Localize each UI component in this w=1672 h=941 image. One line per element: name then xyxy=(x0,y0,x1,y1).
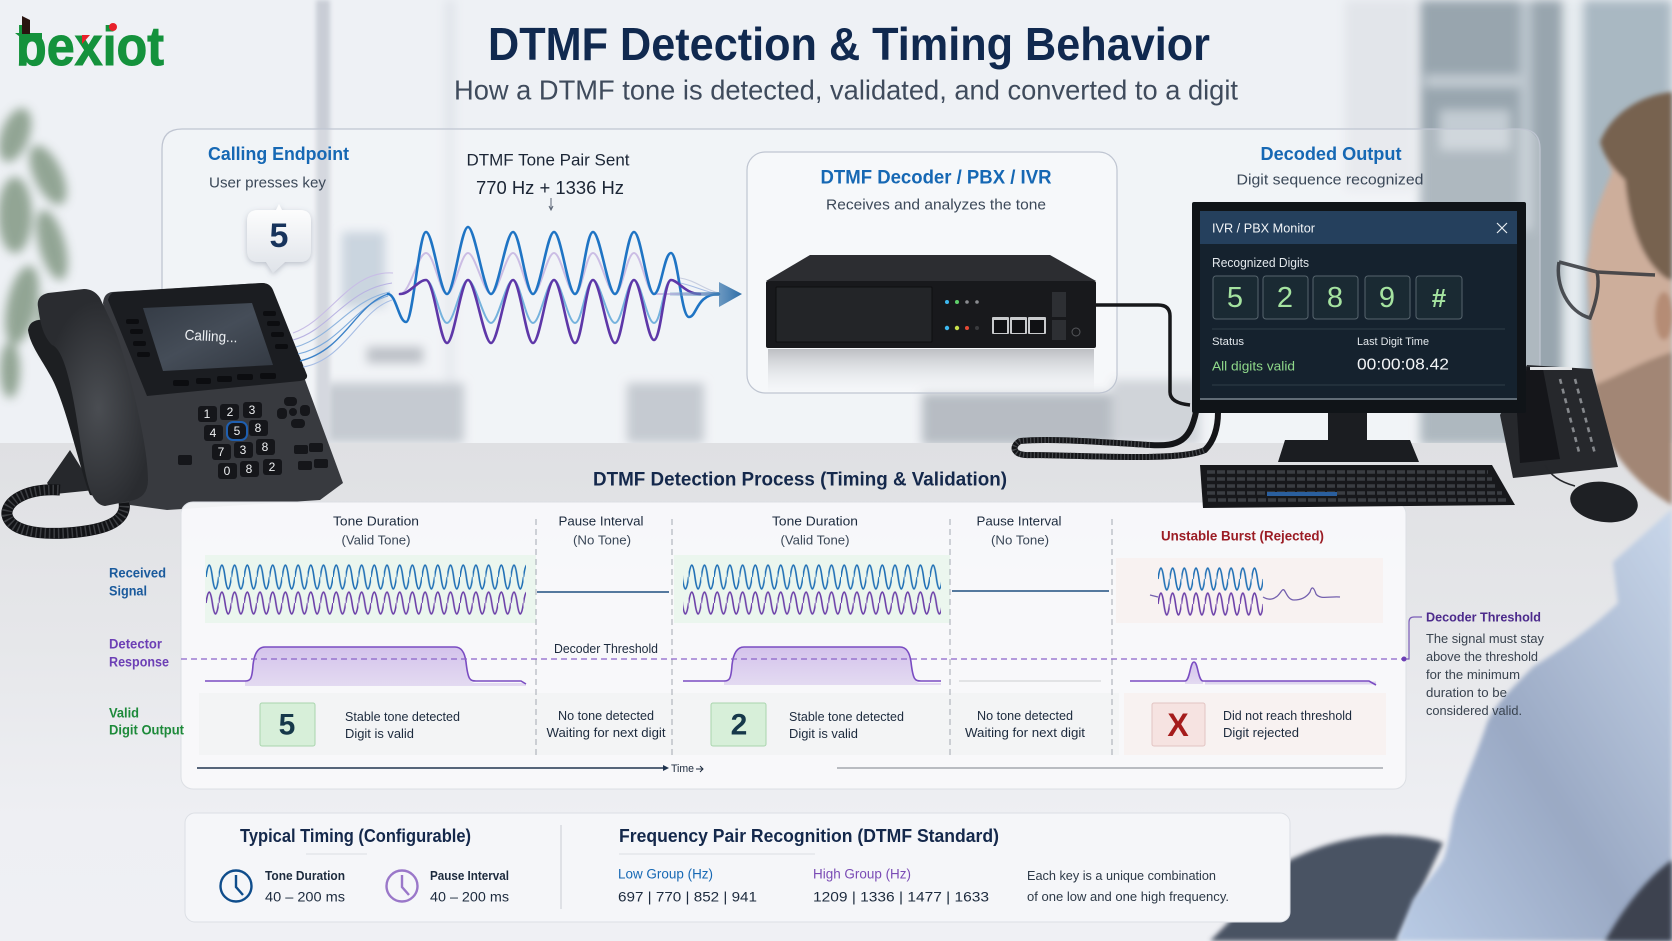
arm shadow xyxy=(1605,860,1672,941)
column heading: pause 1: (No Tone) xyxy=(573,532,631,548)
output: rejected xyxy=(1152,703,1352,746)
output: waiting 2: Waiting for next digit xyxy=(965,726,1086,740)
nav cluster xyxy=(178,397,328,470)
panel: decoder xyxy=(747,152,1117,393)
column heading: tone 1 xyxy=(333,514,419,548)
phone body xyxy=(103,283,343,510)
mouse xyxy=(1545,465,1640,527)
output: rejected: Digit rejected xyxy=(1223,726,1299,740)
output: digit 2 xyxy=(711,703,904,746)
keypad: 3 xyxy=(249,403,256,417)
output: digit 2: 2 xyxy=(731,708,747,742)
output: waiting 2 xyxy=(965,709,1086,740)
row label: valid digit output: Digit Output xyxy=(109,722,184,738)
column heading: pause 2: Pause Interval xyxy=(976,514,1062,528)
decoded output caption: Digit sequence recognized xyxy=(1236,172,1424,188)
tone pair label: DTMF Tone Pair Sent xyxy=(466,150,630,170)
icon: clock pause xyxy=(386,870,418,902)
handset xyxy=(28,289,148,506)
panel: decoder: DTMF Decoder / PBX / IVR xyxy=(820,168,1052,188)
arrow: to decoder xyxy=(670,282,742,307)
column heading: tone 2: (Valid Tone) xyxy=(780,532,850,548)
bezel xyxy=(108,283,307,396)
column heading: pause 1 xyxy=(558,514,644,548)
calling endpoint heading: Calling Endpoint xyxy=(208,144,349,164)
keypad: 2 xyxy=(227,405,234,419)
keyboard xyxy=(1200,465,1515,508)
calling endpoint caption: User presses key xyxy=(209,174,326,192)
chair xyxy=(1210,835,1443,941)
keypad: 8 xyxy=(246,462,253,476)
recognized digits: Recognized Digits xyxy=(1212,256,1309,270)
key combination note: Each key is a unique combination xyxy=(1027,869,1216,883)
output: digit 5: Digit is valid xyxy=(345,727,414,741)
keypad: 3 xyxy=(240,443,247,457)
keypad: 1 xyxy=(204,407,211,421)
keypad: 8 xyxy=(255,421,262,435)
pause interval timing: 40 – 200 ms xyxy=(430,890,509,904)
output: digit 5: 5 xyxy=(279,708,295,742)
last digit time: 00:00:08.42 xyxy=(1357,356,1449,374)
head xyxy=(1587,92,1672,505)
recognized digits: # xyxy=(1432,283,1447,313)
row label: detector response: Detector xyxy=(109,636,163,652)
panel: timing diagram xyxy=(109,502,1406,789)
decoder threshold line xyxy=(181,658,1404,660)
high group: High Group (Hz) xyxy=(813,866,911,882)
cables xyxy=(1015,305,1218,457)
recognized digits: 9 xyxy=(1379,282,1395,314)
column heading: tone 2 xyxy=(772,514,858,548)
output: rejected: X xyxy=(1167,707,1189,743)
key combination note: of one low and one high frequency. xyxy=(1027,890,1229,904)
callout: decoder threshold: considered valid. xyxy=(1426,704,1522,718)
low group: 697 | 770 | 852 | 941 xyxy=(618,890,757,904)
received signal waves xyxy=(206,563,1109,616)
keypad: 5 xyxy=(234,424,241,438)
row label: valid digit output xyxy=(109,706,184,738)
callout: decoder threshold: for the minimum xyxy=(1426,668,1520,682)
window title bar xyxy=(1200,211,1517,244)
heading: typical timing: Typical Timing (Configurable) xyxy=(240,826,471,846)
time axis xyxy=(197,763,1383,775)
right desk phone xyxy=(1500,365,1618,478)
recognized digits: 5 xyxy=(1227,282,1243,314)
section title: detection process: DTMF Detection Process (Timing & Validation) xyxy=(593,470,1007,490)
row label: received signal xyxy=(109,566,166,598)
ear xyxy=(1655,292,1672,340)
screen xyxy=(143,303,273,371)
signal fan lines xyxy=(293,273,719,367)
callout: decoder threshold xyxy=(1402,610,1545,718)
callout: decoder threshold: The signal must stay xyxy=(1426,632,1545,646)
output: waiting 1: No tone detected xyxy=(558,709,654,723)
low group: Low Group (Hz) xyxy=(618,866,713,882)
tone duration timing xyxy=(265,869,345,904)
shirt xyxy=(1397,509,1672,941)
key combination note xyxy=(1027,869,1229,904)
arrow: down to wave xyxy=(549,198,553,210)
column heading: tone 1: (Valid Tone) xyxy=(342,532,410,548)
hair xyxy=(1600,92,1672,280)
keypad xyxy=(198,402,282,479)
column heading: pause 2 xyxy=(976,514,1062,548)
title: DTMF Detection & Timing Behavior xyxy=(488,18,1210,70)
stand xyxy=(47,450,95,494)
face xyxy=(1587,100,1672,505)
pause interval timing xyxy=(430,869,509,904)
tone duration timing: 40 – 200 ms xyxy=(265,890,345,904)
monitor: IVR / PBX Monitor xyxy=(1212,220,1316,236)
main flow panel xyxy=(162,129,1540,443)
soft keys xyxy=(126,311,288,386)
tone duration timing: Tone Duration xyxy=(265,869,345,883)
keypad: 4 xyxy=(210,426,217,440)
output: digit 2: Stable tone detected xyxy=(789,710,904,724)
keypad: 2 xyxy=(269,460,276,474)
output: waiting 2: No tone detected xyxy=(977,709,1073,723)
stand xyxy=(1278,413,1419,462)
output: rejected: Did not reach threshold xyxy=(1223,709,1352,723)
keypad: 0 xyxy=(224,464,231,478)
low group xyxy=(618,866,757,904)
heading: frequency pair: Frequency Pair Recognition (DTMF Standard) xyxy=(619,826,999,846)
panel: decoder: Receives and analyzes the tone xyxy=(826,196,1046,214)
desk phone xyxy=(7,283,343,533)
row label: detector response: Response xyxy=(109,654,169,670)
column heading: rejected: Unstable Burst (Rejected) xyxy=(1161,528,1324,544)
beard xyxy=(1594,352,1672,505)
last digit time xyxy=(1357,336,1449,374)
column heading: tone 2: Tone Duration xyxy=(772,514,858,528)
output: digit 5: Stable tone detected xyxy=(345,710,460,724)
close icon xyxy=(1497,223,1507,233)
status xyxy=(1212,336,1295,374)
key bubble: 5: 5 xyxy=(270,217,288,255)
pause interval timing: Pause Interval xyxy=(430,869,509,883)
threshold label: Decoder Threshold xyxy=(554,642,658,656)
decoder hardware xyxy=(766,255,1096,391)
output: waiting 1 xyxy=(546,709,666,740)
tone backgrounds xyxy=(205,555,1383,623)
output: digit 5 xyxy=(260,703,460,746)
keypad: 8 xyxy=(262,440,269,454)
time axis: Time xyxy=(671,763,694,775)
glasses xyxy=(1558,262,1655,318)
callout: decoder threshold: duration to be xyxy=(1426,686,1507,700)
panel: timing and frequency reference xyxy=(185,813,1290,922)
tone pair label xyxy=(466,150,630,198)
callout: decoder threshold: Decoder Threshold xyxy=(1426,610,1541,624)
plant xyxy=(0,104,74,398)
column heading: tone 1: Tone Duration xyxy=(333,514,419,528)
row label: valid digit output: Valid xyxy=(109,706,139,720)
decoded output heading: Decoded Output xyxy=(1260,144,1402,164)
recognized digits xyxy=(1212,256,1462,319)
row label: detector response xyxy=(109,636,169,670)
output: waiting 1: Waiting for next digit xyxy=(546,726,666,740)
status: Status xyxy=(1212,336,1245,348)
key bubble: 5 xyxy=(247,204,311,273)
recognized digits: 8 xyxy=(1327,282,1343,314)
subtitle: How a DTMF tone is detected, validated, and converted to a digit xyxy=(454,74,1238,106)
cord xyxy=(7,490,124,533)
status: All digits valid xyxy=(1212,358,1295,374)
recognized digits: 2 xyxy=(1277,282,1293,314)
row label: received signal: Signal xyxy=(109,584,147,598)
screen text: Calling... xyxy=(184,328,238,346)
row label: received signal: Received xyxy=(109,566,166,580)
rejected burst wave xyxy=(1150,566,1340,617)
keypad: 7 xyxy=(218,445,225,459)
tone pair label: 770 Hz + 1336 Hz xyxy=(476,178,624,198)
high group xyxy=(813,866,989,904)
output: digit 2: Digit is valid xyxy=(789,727,858,741)
column heading: pause 2: (No Tone) xyxy=(991,532,1049,548)
last digit time: Last Digit Time xyxy=(1357,336,1429,348)
column heading: pause 1: Pause Interval xyxy=(558,514,644,528)
detector responses xyxy=(205,647,1376,686)
logo: bexiot: bexiot xyxy=(16,15,164,77)
output row band xyxy=(199,693,1386,755)
icon: clock tone xyxy=(220,870,252,902)
DTMF waveform xyxy=(388,227,719,343)
monitor xyxy=(1192,202,1526,462)
seated person xyxy=(1210,92,1672,941)
high group: 1209 | 1336 | 1477 | 1633 xyxy=(813,890,989,904)
callout: decoder threshold: above the threshold xyxy=(1426,650,1538,664)
